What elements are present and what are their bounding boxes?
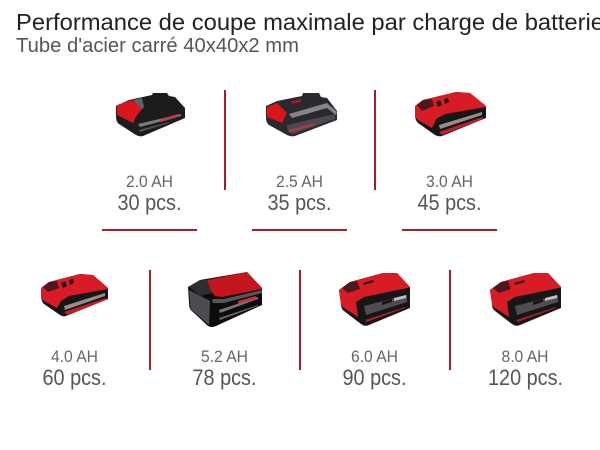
icon: battery 6.0 Ah (339, 273, 410, 326)
label: 2.0 Ah, 30 pcs: 2.0 AH (126, 173, 173, 191)
title: Performance de coupe maximale par charge de batterie (16, 9, 600, 35)
label: 5.2 Ah, 78 pcs (192, 348, 256, 390)
label: 8.0 Ah, 120 pcs: 120 pcs. (488, 365, 563, 390)
label: 3.0 Ah, 45 pcs: 3.0 AH (426, 173, 473, 191)
label: 3.0 Ah, 45 pcs (418, 173, 482, 215)
icon: battery 2.0 Ah (116, 93, 185, 136)
label: 2.0 Ah, 30 pcs (118, 173, 182, 215)
subtitle: Tube d'acier carré 40x40x2 mm (16, 35, 299, 57)
label: 8.0 Ah, 120 pcs: 8.0 AH (502, 348, 548, 366)
label: 4.0 Ah, 60 pcs (42, 348, 106, 390)
label: 2.5 Ah, 35 pcs: 2.5 AH (276, 173, 323, 191)
icon: battery 2.5 Ah (266, 93, 337, 136)
label: 4.0 Ah, 60 pcs: 60 pcs. (42, 365, 106, 390)
icon: battery 4.0 Ah (41, 274, 108, 316)
label: 8.0 Ah, 120 pcs (488, 348, 563, 390)
label: 2.0 Ah, 30 pcs: 30 pcs. (118, 190, 182, 215)
label: 4.0 Ah, 60 pcs: 4.0 AH (51, 348, 98, 366)
label: 5.2 Ah, 78 pcs: 5.2 AH (201, 348, 248, 366)
label: 5.2 Ah, 78 pcs: 78 pcs. (192, 365, 256, 390)
icon: battery 8.0 Ah (490, 273, 561, 326)
divider lines (102, 90, 497, 370)
label: 2.5 Ah, 35 pcs: 35 pcs. (268, 190, 332, 215)
label: 6.0 Ah, 90 pcs: 6.0 AH (351, 348, 398, 366)
label: 6.0 Ah, 90 pcs (342, 348, 406, 390)
label: 6.0 Ah, 90 pcs: 90 pcs. (342, 365, 406, 390)
icon: battery 3.0 Ah (415, 92, 486, 136)
icon: battery 5.2 Ah (188, 272, 262, 327)
label: 3.0 Ah, 45 pcs: 45 pcs. (418, 190, 482, 215)
label: 2.5 Ah, 35 pcs (268, 173, 332, 215)
